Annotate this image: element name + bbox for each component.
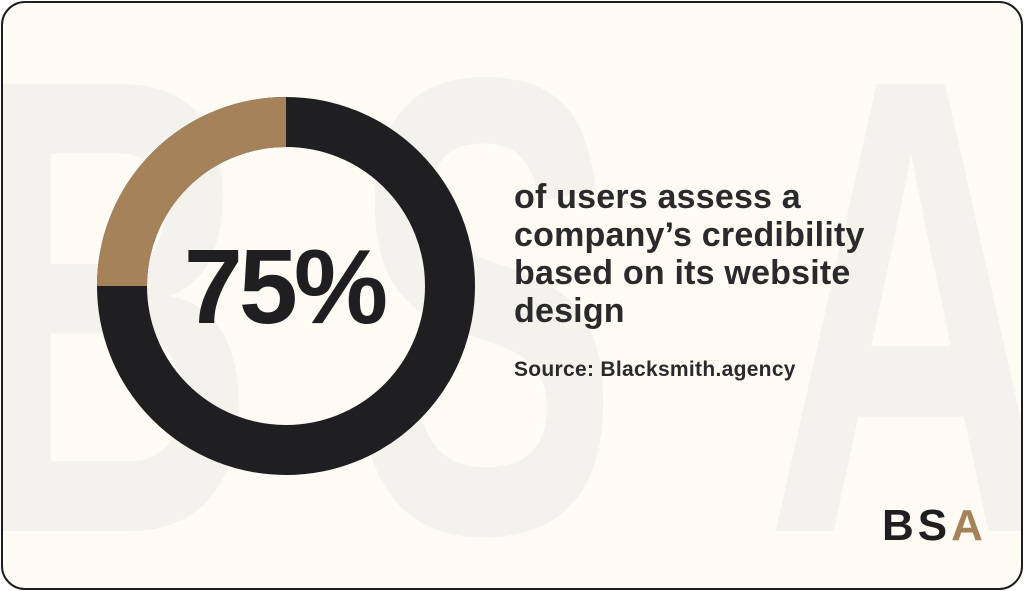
source: Source: Blacksmith.agency [514, 358, 796, 381]
statement text: company’s credibility [514, 216, 865, 254]
statement text: based on its website [514, 254, 851, 292]
statement text: design [514, 292, 625, 330]
logo: BSA: BSA [882, 501, 987, 550]
statement text: of users assess a [514, 178, 801, 216]
percentage label: 75% [184, 228, 386, 346]
statement text [514, 178, 865, 330]
